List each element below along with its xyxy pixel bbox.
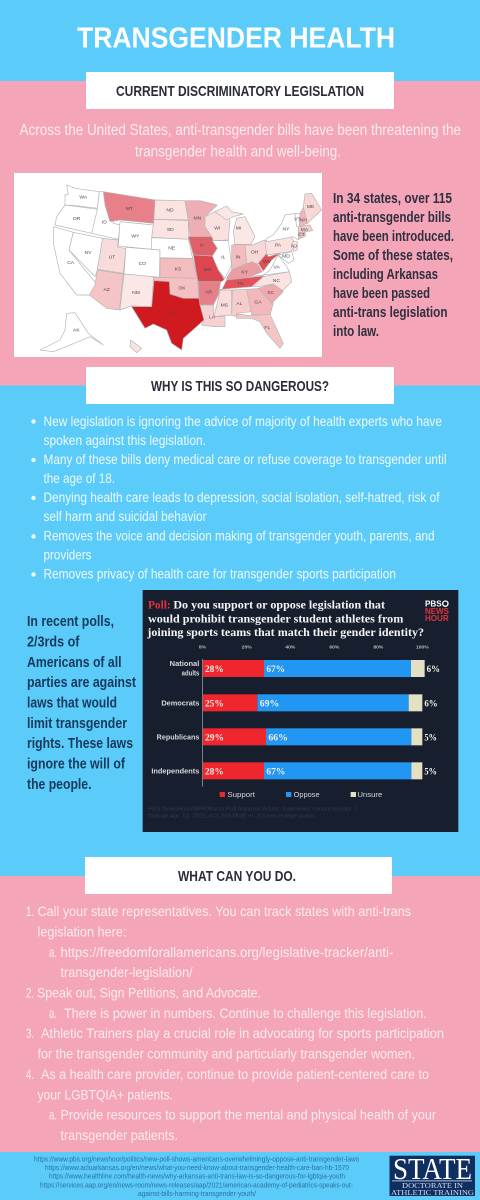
map panel: US states: FL	[264, 325, 270, 331]
logo: PBS NewsHour: PBS	[425, 599, 442, 609]
text: recent polls: parties are against	[27, 674, 136, 691]
map panel: US states: VA	[274, 265, 280, 271]
logo: PBS NewsHour	[425, 599, 449, 623]
map panel: US states: MT	[126, 206, 133, 212]
bar: national adults: National	[170, 659, 199, 668]
numbered list: actions: As a health care provider, continue to provide patient-centered care to	[41, 1066, 429, 1082]
map panel: US states: WI	[214, 225, 220, 231]
bar: democrats: Democrats	[161, 699, 199, 708]
numbered list: actions: There is power in numbers. Continue to challenge this legislation.	[64, 1005, 427, 1021]
map panel: US states: NM	[132, 290, 140, 296]
references: https://services.aap.org/en/news-room/news-releases/aap/2021/american-academy-of-pediatrics-speaks-out-	[40, 1180, 353, 1190]
text: bills introduced: anti-trans legislation	[333, 304, 448, 321]
numbered list: actions: transgender-legislation/	[60, 964, 193, 980]
map panel: US states: LA	[209, 314, 216, 320]
numbered list: actions: 1.	[26, 903, 34, 919]
map panel: US states: NJ	[291, 244, 298, 250]
references: https://www.acluarkansas.org/en/news/what-you-need-know-about-transgender-health-care-ban-hb-1570	[45, 1163, 349, 1172]
map panel: US states: MO	[204, 267, 212, 273]
bar: republicans: 5%	[424, 732, 437, 743]
text: recent polls: In recent polls,	[27, 613, 114, 630]
map panel: US states: MN	[193, 215, 202, 221]
chart title: would prohibit transgender student athletes from	[148, 613, 404, 625]
title: TRANSGENDER HEALTH	[77, 22, 395, 54]
map panel: US states: VT	[294, 217, 301, 223]
axis: 20%	[242, 644, 252, 650]
map panel: US states: CO	[139, 261, 146, 267]
axis: 100%	[416, 644, 429, 650]
numbered list: actions: legislation here:	[38, 924, 126, 940]
map panel: US states: ME	[307, 204, 315, 210]
text: recent polls: rights. These laws	[27, 735, 133, 752]
map panel: US states: AK	[73, 327, 80, 333]
heading: what can you do	[85, 857, 392, 894]
map panel: US states: OK	[178, 285, 186, 291]
map panel: US states: CA	[67, 260, 75, 266]
references: https://www.pbs.org/newshour/politics/new-poll-shows-americans-overwhelmingly-oppose-anti-transgender-laws	[34, 1154, 359, 1164]
chart source note	[148, 806, 358, 820]
axis: 0%	[199, 644, 206, 650]
heading: why is this so dangerous: WHY IS THIS SO DANGEROUS?	[151, 378, 329, 395]
map panel: US states: KS	[175, 267, 182, 273]
bar: independents: 5%	[424, 766, 437, 777]
bar: democrats: 25%	[205, 698, 224, 709]
numbered list: actions	[26, 903, 444, 1143]
intro text	[20, 122, 461, 160]
legend: Oppose	[294, 790, 320, 799]
text: bills introduced	[333, 190, 454, 340]
heading: what can you do: WHAT CAN YOU DO.	[178, 868, 296, 885]
text: bills introduced: into law.	[333, 323, 379, 340]
map panel: US states: KY	[241, 269, 249, 275]
bar: republicans: Republicans	[157, 732, 199, 741]
bar: independents	[151, 762, 437, 779]
logo: PBS NewsHour: HOUR	[425, 613, 449, 623]
map panel: US states: IA	[200, 243, 205, 249]
bar: democrats: 6%	[424, 698, 438, 709]
intro text: transgender health and well-being.	[135, 144, 341, 160]
map panel: US states: UT	[109, 254, 115, 260]
heading: why is this so dangerous	[86, 367, 394, 404]
bullet list: dangers: self harm and suicidal behavior	[44, 508, 207, 524]
map panel: US states: CT	[298, 232, 305, 238]
text: recent polls: Americans of all	[27, 654, 122, 671]
numbered list: actions: Provide resources to support the mental and physical health of your	[60, 1106, 436, 1122]
bar: republicans: 66%	[268, 732, 288, 743]
map panel: US states: WY	[131, 233, 140, 239]
map panel: US states: NC	[273, 278, 280, 284]
bar: national adults: 6%	[427, 664, 440, 675]
map panel: US states: OH	[251, 250, 259, 256]
numbered list: actions: a.	[49, 1106, 57, 1122]
bar: republicans: 29%	[205, 732, 224, 743]
bar: independents: 67%	[266, 766, 285, 777]
map panel: US states: MI	[236, 225, 241, 231]
bar: democrats	[161, 694, 438, 711]
numbered list: actions: a.	[49, 1005, 57, 1021]
map panel: US states: NH	[300, 218, 307, 224]
numbered list: actions: Call your state representatives. You can track states with anti-trans	[38, 903, 411, 919]
chart title	[146, 599, 424, 639]
map panel: US states: SD	[167, 227, 174, 233]
map panel: US states: AL	[236, 301, 243, 307]
map panel: US states: MS	[221, 303, 229, 309]
map panel: US states: IN	[235, 254, 241, 260]
logo: State Doctorate in Athletic Training: DOCTORATE IN	[402, 1181, 464, 1190]
map panel: US states: ND	[166, 208, 174, 214]
text: bills introduced: including Arkansas	[333, 266, 438, 283]
map panel: US states: PA	[275, 242, 282, 248]
numbered list: actions: 2.	[26, 984, 34, 1000]
map panel: US states: NE	[168, 246, 176, 252]
map panel: US states: ID	[102, 220, 107, 226]
map panel: US states: NY	[283, 227, 290, 233]
heading: current discriminatory legislation: CURRENT DISCRIMINATORY LEGISLATION	[116, 83, 364, 100]
bar: independents: 28%	[205, 766, 224, 777]
map panel: US states: TN	[237, 281, 244, 287]
map panel: US states: WV	[263, 259, 272, 265]
bar: independents: Independents	[151, 767, 199, 776]
chart source note: through Apr. 13, 2021, n=1,066 MOE +/- 3.5 percentage points.	[148, 814, 317, 820]
text: bills introduced: have been passed	[333, 285, 430, 302]
legend	[220, 790, 382, 799]
references: against-bills-harming-transgender-youth/	[138, 1189, 257, 1198]
map panel: US states: WA	[79, 195, 88, 201]
heading: current discriminatory legislation	[86, 72, 394, 109]
bar: democrats: 69%	[260, 698, 279, 709]
map panel: US states: SC	[267, 290, 275, 296]
bar: national adults	[170, 659, 440, 677]
bar: national adults: 67%	[266, 664, 285, 675]
map panel: US states: AR	[205, 290, 213, 296]
numbered list: actions: https://freedomforallamericans.org/legislative-tracker/anti-	[60, 944, 394, 960]
map panel: US states: AZ	[103, 287, 110, 293]
map panel: US states: NV	[85, 250, 92, 256]
chart title: joining sports teams that match their gender identity?	[146, 627, 424, 639]
axis	[199, 644, 429, 787]
numbered list: actions: transgender patients.	[60, 1127, 178, 1143]
bullet list: dangers	[31, 413, 447, 582]
chart title: Poll:	[148, 599, 171, 611]
text: recent polls	[27, 613, 136, 793]
logo: State Doctorate in Athletic Training: ATHLETIC TRAINING	[391, 1188, 475, 1197]
legend: Unsure	[357, 790, 382, 799]
bar: republicans	[157, 728, 437, 745]
map panel: US states: TX	[168, 311, 176, 317]
bullet list: dangers: providers	[44, 546, 92, 562]
text: recent polls: ignore the will of	[27, 756, 126, 772]
text: recent polls: 2/3rds of	[27, 634, 80, 650]
bar: national adults: 28%	[205, 664, 224, 675]
references: https://www.healthline.com/health-news/why-arkansas-anti-trans-law-is-so-dangerous-for-lgbtqia-youth	[49, 1172, 345, 1181]
map panel: US states: OR	[73, 216, 81, 222]
numbered list: actions: Speak out, Sign Petitions, and Advocate.	[37, 984, 261, 1000]
references	[34, 1154, 359, 1198]
numbered list: actions: a.	[49, 944, 57, 960]
chart source note: PBS NewsHour/NPR/Marist Poll National Adults. Interviews conducted Apr. 7	[148, 806, 358, 812]
bar: national adults: adults	[182, 668, 199, 677]
bullet list: dangers: Removes privacy of health care for transgender sports participation	[44, 566, 396, 582]
bullet list: dangers: the age of 18.	[44, 470, 115, 486]
map panel: US states: GA	[254, 300, 262, 306]
map panel: US states: MA	[301, 227, 309, 233]
text: recent polls: limit transgender	[27, 715, 127, 732]
text: recent polls: laws that would	[27, 694, 117, 712]
numbered list: actions: 3.	[26, 1025, 34, 1041]
logo: State Doctorate in Athletic Training	[390, 1151, 475, 1197]
numbered list: actions: your LGBTQIA+ patients.	[38, 1086, 173, 1102]
chart title: Do you support or oppose legislation that	[173, 599, 385, 611]
map panel: US states: IL	[221, 255, 226, 261]
numbered list: actions: Athletic Trainers play a crucial role in advocating for sports participation	[41, 1025, 444, 1041]
numbered list: actions: 4.	[26, 1066, 34, 1082]
map panel: US states: MD	[282, 253, 290, 259]
axis: 80%	[373, 644, 384, 650]
text: recent polls: the people.	[27, 776, 92, 793]
legend: Support	[227, 790, 255, 799]
bullet list: dangers: spoken against this legislation.	[44, 432, 206, 448]
bar chart: poll	[143, 590, 458, 832]
axis: 40%	[285, 644, 296, 650]
logo: PBS NewsHour: NEWS	[425, 606, 449, 616]
map panel: US states	[14, 173, 322, 357]
numbered list: actions: for the transgender community and particularly transgender women.	[38, 1046, 415, 1062]
text: bills introduced: In 34 states, over 115	[333, 190, 452, 207]
axis: 60%	[329, 644, 340, 650]
